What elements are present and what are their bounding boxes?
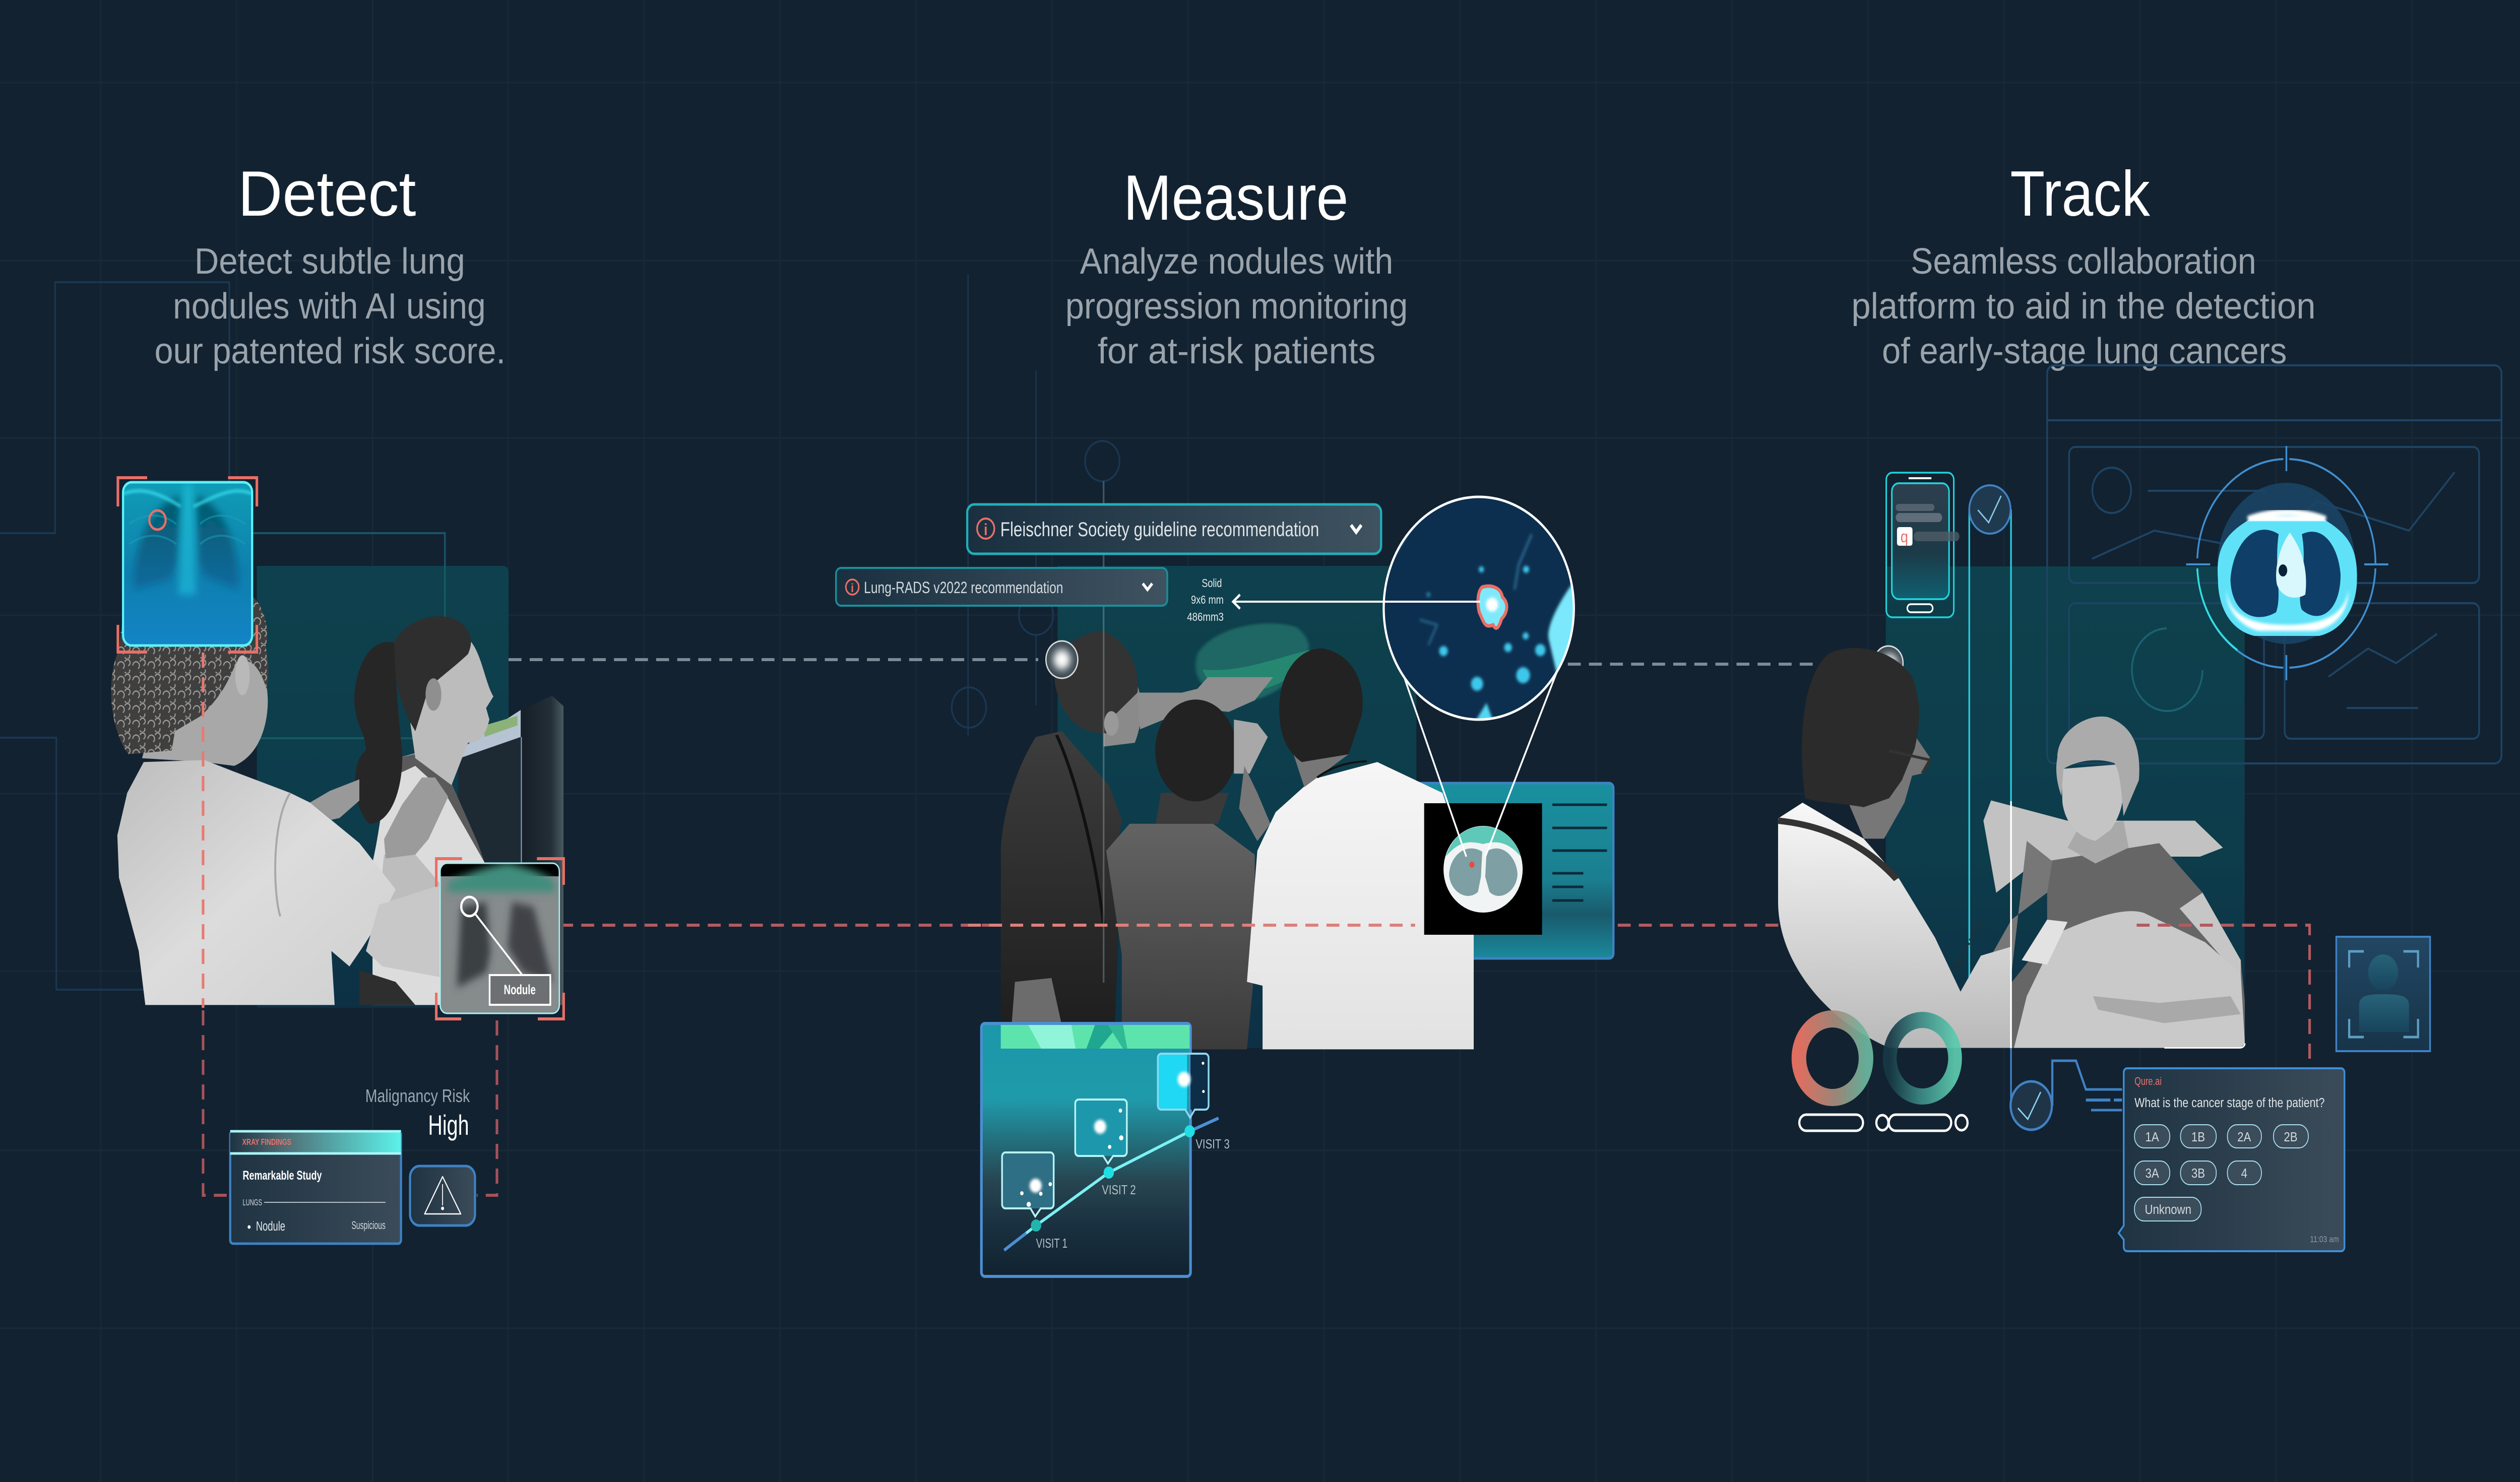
woman patient: [310, 616, 493, 1005]
text: measure description: [1065, 241, 1408, 371]
brackets: chest xray: [118, 478, 257, 652]
trend line: [1004, 1118, 1219, 1250]
bar: lung-rads recommendation: [836, 568, 1167, 606]
bar: fleischner recommendation: i: [984, 521, 988, 539]
chat card: qure.ai: [2119, 1068, 2345, 1251]
visit 2: VISIT 2: [1102, 1183, 1136, 1197]
capsule divider line: [2010, 801, 2012, 1048]
label: Nodule: [489, 975, 550, 1005]
dashed connector: right red: [477, 1020, 497, 1195]
hologram: 3d nodule: [1195, 623, 1309, 701]
text: nodule measurements: [1187, 577, 1224, 623]
circuit connector: [2052, 1061, 2122, 1110]
text: malignancy risk: [365, 1086, 470, 1141]
icon: bottom check: [2010, 1081, 2052, 1130]
card: user id: [2336, 937, 2430, 1051]
man from behind: [111, 596, 445, 1005]
chat card: qure.ai: Unknown: [2145, 1202, 2191, 1217]
pills: [1799, 1115, 1968, 1131]
card: xray findings: Suspicious: [351, 1219, 386, 1232]
text: measure description: for at-risk patients: [1098, 331, 1375, 371]
visit 3: [1158, 1054, 1230, 1151]
chart: donut green: [1889, 1020, 1955, 1097]
clinician middle: [1106, 699, 1271, 1049]
panel: track: [1778, 158, 2501, 1251]
text: track description: [1851, 241, 2316, 371]
panel: detect: [111, 158, 1415, 1244]
chat card: qure.ai: 3B: [2191, 1166, 2205, 1181]
teal backdrop: [1057, 566, 1416, 1048]
text: detect description: our patented risk score.: [154, 331, 506, 371]
card: xray findings: [230, 1131, 401, 1244]
text: track description: of early-stage lung cancers: [1882, 331, 2287, 371]
text: nodule measurements: 9x6 mm: [1191, 594, 1224, 606]
visit 1: [1002, 1152, 1067, 1251]
panel: measure: [836, 162, 1818, 1276]
text: detect description: [154, 241, 506, 371]
bar: fleischner recommendation: Fleischner Society guideline recommendation: [1000, 518, 1319, 541]
teal backdrop: [257, 566, 509, 1008]
bar: lung-rads recommendation: i: [851, 581, 854, 595]
card: xray findings: Remarkable Study: [242, 1168, 322, 1182]
dashed connector: gray to track: [1568, 663, 1818, 666]
doctor: [1778, 648, 2011, 1048]
clinician right: [1247, 648, 1474, 1049]
magnifier: nodule closeup: [1379, 484, 1584, 857]
target reticle with ct: [2186, 446, 2388, 680]
card: ct scan: [1414, 783, 1613, 958]
dashed connector: red to chat: [2136, 925, 2310, 1067]
visit 1: VISIT 1: [1036, 1236, 1067, 1251]
arrow: measurement pointer: [1233, 595, 1480, 609]
chat card: qure.ai: 1A: [2146, 1130, 2159, 1144]
card: visit progression: [981, 1023, 1230, 1276]
answer options: [2134, 1125, 2308, 1221]
xray image: blue chest: [123, 482, 252, 646]
photo: technician and patient: [111, 596, 563, 1005]
teal backdrop: [1886, 566, 2245, 1048]
chat card: qure.ai: 2B: [2284, 1130, 2298, 1144]
capsule lines: [1969, 509, 2011, 998]
text: measure description: progression monitoring: [1065, 286, 1408, 327]
xray machine: [458, 696, 563, 1005]
text: nodule measurements: 486mm3: [1187, 611, 1224, 623]
bar: fleischner recommendation: [967, 504, 1381, 554]
ball marker: [1046, 641, 1078, 678]
title: Detect: Detect: [238, 158, 416, 230]
visit 2: [1075, 1100, 1136, 1197]
text: malignancy risk: Malignancy Risk: [365, 1086, 470, 1107]
text: track description: platform to aid in the detection: [1851, 286, 2316, 327]
bar: lung-rads recommendation: Lung-RADS v2022 recommendation: [864, 579, 1063, 597]
dashed connector: red to track: [1618, 924, 1780, 927]
dashed connector: left red: [202, 653, 205, 1008]
chat card: qure.ai: 4: [2241, 1166, 2247, 1181]
chat card: qure.ai: 3A: [2146, 1166, 2159, 1181]
title: Measure: Measure: [1123, 162, 1348, 234]
dashed connector: gray to measure: [509, 658, 1038, 661]
text: detect description: nodules with AI using: [173, 286, 486, 327]
text: measure description: Analyze nodules with: [1080, 241, 1393, 282]
text: track description: Seamless collaboration: [1911, 241, 2256, 282]
chart: donut red: [1799, 1019, 1866, 1098]
text: malignancy risk: High: [428, 1110, 469, 1141]
chat card: qure.ai: Qure.ai: [2134, 1075, 2162, 1087]
card: xray findings: LUNGS: [242, 1197, 262, 1207]
nodule: [1478, 586, 1507, 628]
ball marker behind doctor: [1874, 646, 1903, 680]
ghost dashboard: [2047, 365, 2501, 763]
dashed connector: red to measure: [560, 924, 1415, 927]
visit 3: VISIT 3: [1195, 1137, 1230, 1151]
icon: phone: q: [1901, 528, 1908, 546]
chat card: qure.ai: 2A: [2237, 1130, 2251, 1144]
photo: doctor and patient: [1778, 648, 2245, 1048]
brackets: nodule xray: [436, 859, 563, 1019]
clinician left: [1001, 631, 1273, 1049]
photo: three clinicians: [1001, 631, 1474, 1049]
icon: warning: [410, 1166, 475, 1226]
chat card: qure.ai: 1B: [2191, 1130, 2205, 1144]
title: Track: Track: [2010, 158, 2151, 230]
text: nodule measurements: Solid: [1202, 577, 1222, 590]
patient: [1983, 717, 2245, 1048]
ct image: [1424, 803, 1542, 935]
text: detect description: Detect subtle lung: [195, 241, 465, 282]
card: xray findings: XRAY FINDINGS: [242, 1137, 291, 1147]
xray image: nodule: [440, 863, 559, 1013]
icon: phone: [1886, 473, 1960, 617]
label: Nodule: Nodule: [504, 982, 536, 997]
icon: top check: [1969, 485, 2010, 534]
chat card: qure.ai: 11:03 am: [2310, 1234, 2339, 1244]
chat card: qure.ai: What is the cancer stage of the patient?: [2134, 1096, 2324, 1110]
card: xray findings: Nodule: [256, 1219, 285, 1234]
